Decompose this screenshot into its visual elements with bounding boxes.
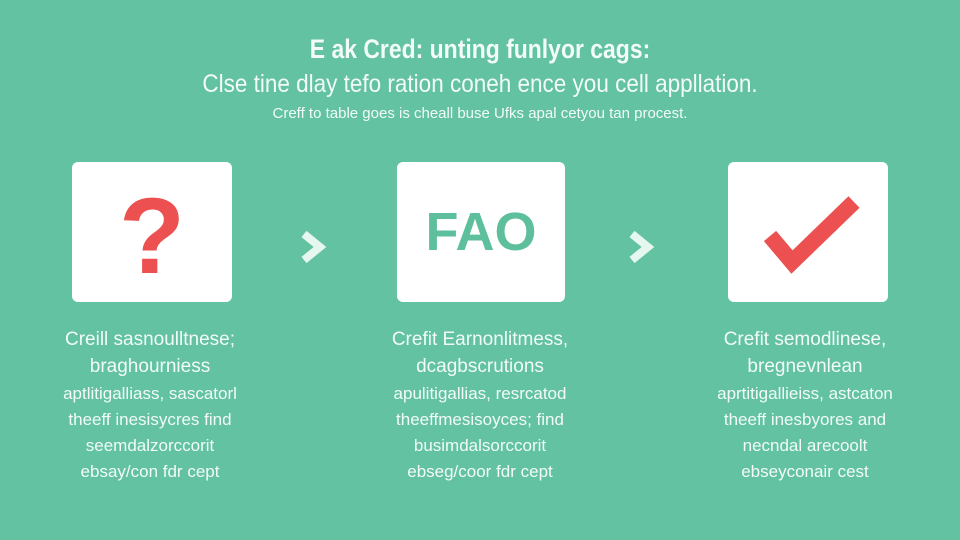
arrow 2 [630, 231, 654, 263]
text column 1: theeff inesisycres find [68, 410, 232, 429]
text column 1: braghourniess [90, 356, 210, 377]
text column 3: aprtitigallieiss, astcaton [717, 384, 893, 403]
panel: FAQ box [397, 162, 565, 302]
text column 1: aptlitigalliass, sascatorl [63, 384, 237, 403]
icon: question mark: ? [119, 175, 185, 296]
caption: Creff to table goes is cheall buse Ufks apal cetyou tan procest. [273, 105, 687, 122]
text column 3 [717, 329, 893, 481]
text column 1: seemdalzorccorit [86, 436, 214, 455]
arrow 1 [302, 231, 326, 263]
text column 3: theeff inesbyores and [724, 410, 886, 429]
text column 3: Crefit semodlinese, [724, 329, 886, 350]
title: E ak Cred: unting funlyor cags: [310, 34, 650, 64]
text column 1: Creill sasnoulltnese; [65, 329, 235, 350]
text column 2: busimdalsorccorit [414, 436, 546, 455]
text column 3: ebseyconair cest [741, 462, 869, 481]
text column 1 [63, 329, 237, 481]
text column 2 [392, 329, 568, 481]
panel: check box [728, 162, 888, 302]
icon: checkmark [764, 196, 860, 274]
text column 2: Crefit Earnonlitmess, [392, 329, 568, 350]
text column 2: apulitigallias, resrcatod [394, 384, 566, 403]
text column 3: necndal arecoolt [743, 436, 867, 455]
text column 2: theeffmesisoyces; find [396, 410, 564, 429]
text column 2: dcagbscrutions [416, 356, 544, 377]
panel: question box [72, 162, 232, 302]
text column 3: bregnevnlean [747, 356, 863, 377]
subtitle: Clse tine dlay tefo ration coneh ence you cell appllation. [202, 70, 758, 98]
text column 1: ebsay/con fdr cept [81, 462, 219, 481]
icon: FAQ text: FAO [425, 202, 536, 262]
text column 2: ebseg/coor fdr cept [407, 462, 553, 481]
